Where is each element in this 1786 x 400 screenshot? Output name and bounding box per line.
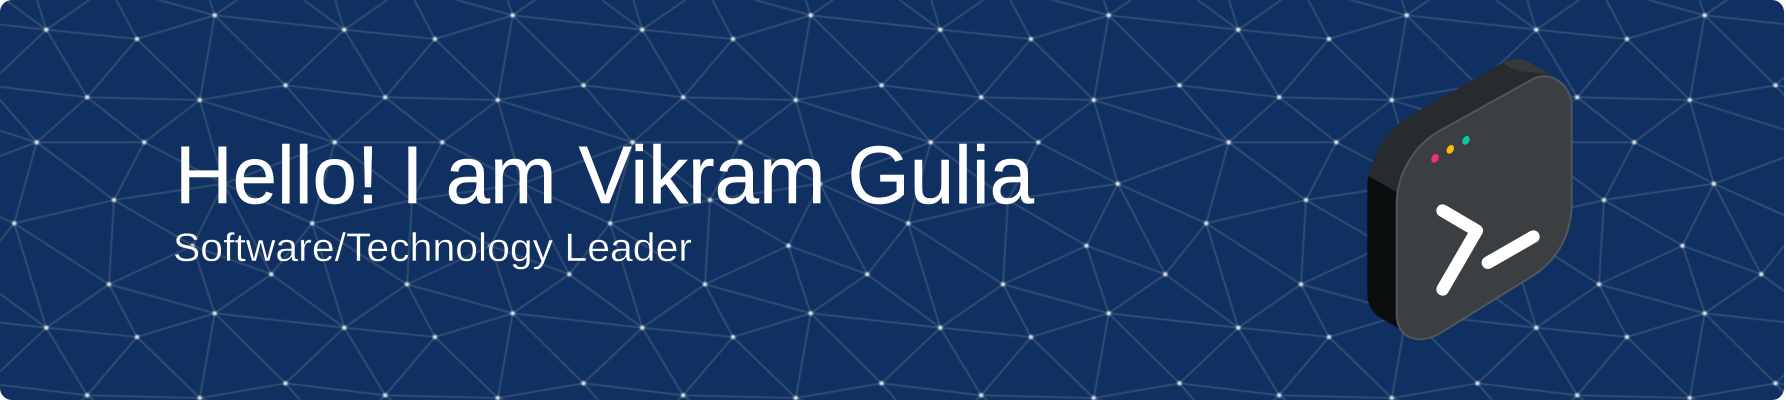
icon: front face (1397, 76, 1572, 339)
icon: top corner highlight (1503, 59, 1551, 75)
icon: left side (1367, 176, 1402, 331)
title: Hello! I am Vikram Gulia (175, 130, 1034, 221)
icon: top side (1368, 59, 1551, 193)
icon: isometric terminal (1367, 59, 1572, 339)
icon: prompt chevron and cursor (1443, 211, 1533, 289)
subtitle: Software/Technology Leader (173, 226, 692, 270)
icon: window dots (1430, 135, 1471, 164)
